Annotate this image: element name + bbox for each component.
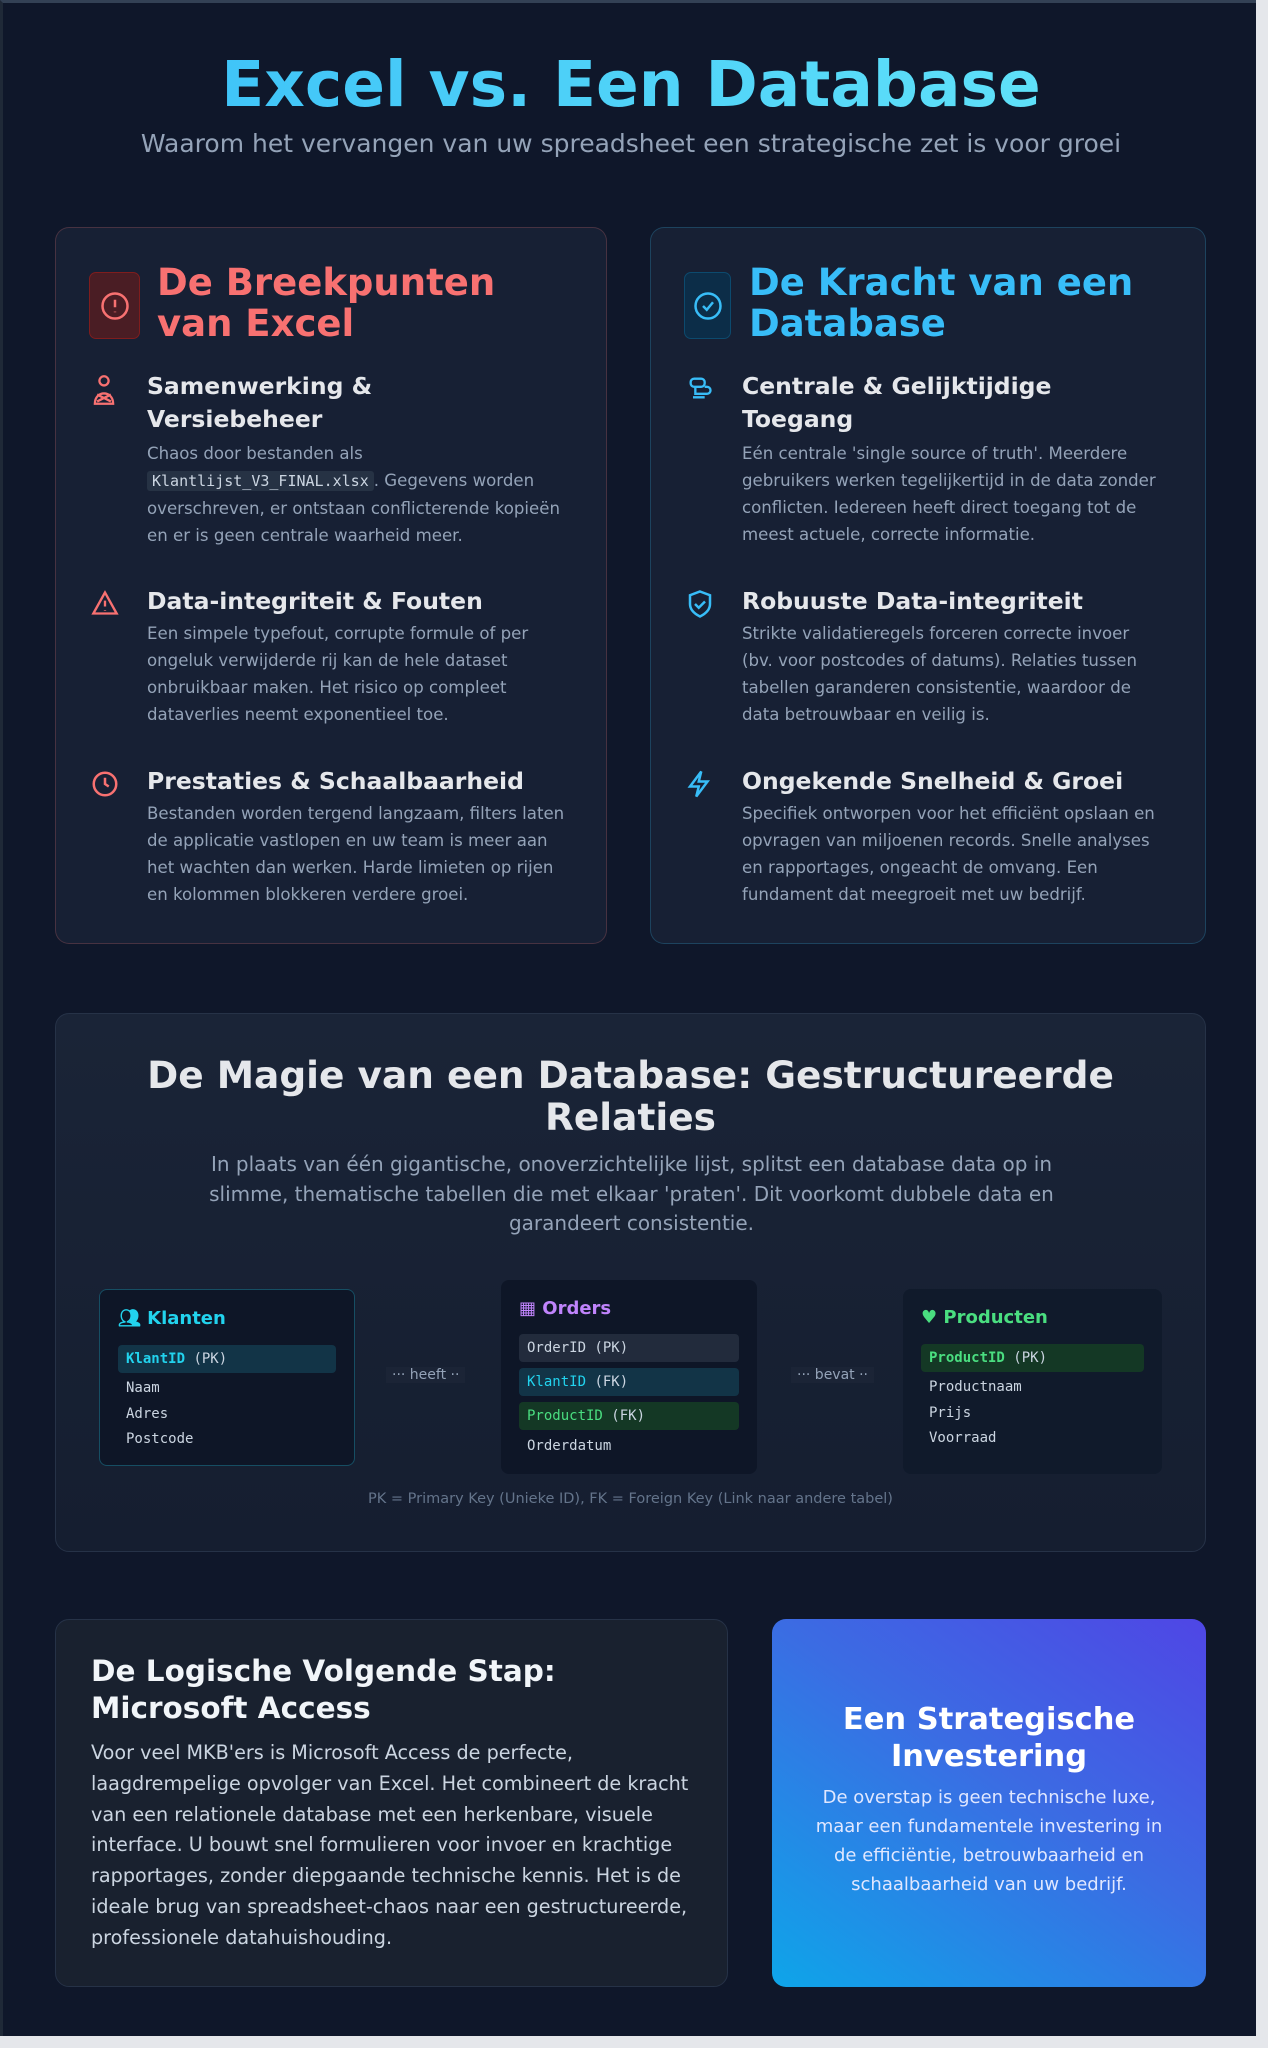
panel: breekpunten van excel: Data-integriteit & Fouten — [147, 587, 483, 615]
table: producten: Prijs — [929, 1405, 971, 1421]
title — [3, 45, 1259, 125]
panel: kracht van een database — [650, 227, 1206, 944]
callout: strategische investering — [772, 1619, 1206, 1987]
heading: De Breekpunten — [157, 261, 495, 304]
table: producten: Voorraad — [929, 1430, 996, 1446]
panel: kracht van een database: Centrale & Gelijktijdige Toegang — [742, 372, 1051, 433]
heading: Een Strategische — [843, 1702, 1135, 1737]
table: producten: ProductID (PK) — [929, 1350, 1047, 1366]
description: In plaats van één gigantische, onoverzichtelijke lijst, splitst een database data op in slimme, thematische tabellen die met elkaar 'praten'. Dit voorkomt dubbele data en garandeert consistentie. — [209, 1152, 1054, 1235]
section heading: De Magie van een Database: Gestructureerde — [147, 1053, 1114, 1097]
panel: breekpunten van excel — [55, 227, 607, 944]
body: De overstap is geen technische luxe, maar een fundamentele investering in de efficiëntie, betrouwbaarheid en schaalbaarheid van uw bedrijf. — [816, 1787, 1162, 1895]
heading — [843, 1702, 1135, 1774]
item: prestaties — [92, 767, 564, 904]
table: klanten: Naam — [126, 1380, 160, 1396]
heading: van Excel — [157, 302, 354, 345]
panel: breekpunten van excel: Chaos door bestanden als Klantlijst_V3_FINAL.xlsx . Gegevens worden overschreven, er ontstaan conflicterende kopieën en er is geen centrale waarheid meer. — [147, 444, 560, 545]
table: klanten: 👥︎ Klanten — [118, 1308, 226, 1329]
section heading: Relaties — [545, 1095, 716, 1139]
heading — [749, 261, 1133, 345]
item: samenwerking — [94, 372, 560, 545]
heading: Database — [749, 302, 946, 345]
panel: microsoft access — [55, 1619, 728, 1987]
panel: kracht van een database: Ongekende Snelheid & Groei — [742, 767, 1123, 795]
table: orders: ProductID (FK) — [527, 1408, 645, 1424]
legend: PK = Primary Key (Unieke ID), FK = Foreign Key (Link naar andere tabel) — [368, 1491, 893, 1507]
label: heeft: ··· heeft ·· — [392, 1367, 459, 1383]
table: orders: OrderID (PK) — [527, 1340, 628, 1356]
table: producten: ♥ Producten — [921, 1307, 1048, 1328]
panel: kracht van een database: Specifiek ontworpen voor het efficiënt opslaan en opvragen van miljoenen records. Snelle analyses en rapportages, ongeacht de omvang. Een fundament dat meegroeit met uw bedrijf. — [742, 804, 1155, 904]
heading: Investering — [891, 1739, 1087, 1774]
heading: De Logische Volgende Stap: — [91, 1654, 556, 1688]
icon: check — [684, 272, 731, 339]
item: data-integriteit — [91, 587, 528, 724]
section heading — [147, 1053, 1114, 1139]
panel: breekpunten van excel: Een simpele typefout, corrupte formule of per ongeluk verwijderde rij kan de hele dataset onbruikbaar maken. Het risico op compleet dataverlies neemt exponentieel toe. — [147, 624, 528, 724]
panel: kracht van een database: Strikte validatieregels forceren correcte invoer (bv. voor postcodes of datums). Relaties tussen tabellen garanderen consistentie, waardoor de data betrouwbaar en veilig is. — [742, 624, 1137, 724]
panel: kracht van een database: Robuuste Data-integriteit — [742, 587, 1083, 615]
subtitle: Waarom het vervangen van uw spreadsheet een strategische zet is voor groei — [141, 129, 1121, 158]
panel: breekpunten van excel: Bestanden worden tergend langzaam, filters laten de applicatie vastlopen en uw team is meer aan het wachten dan werken. Harde limieten op rijen en kolommen blokkeren verdere groei. — [147, 804, 564, 904]
table: orders: KlantID (FK) — [527, 1374, 628, 1390]
table: klanten — [99, 1289, 355, 1466]
icon: alert — [89, 272, 140, 339]
table: klanten: KlantID (PK) — [126, 1351, 227, 1367]
table: producten: Productnaam — [929, 1379, 1022, 1395]
panel: breekpunten van excel: Prestaties & Schaalbaarheid — [147, 767, 524, 795]
table: orders — [501, 1280, 757, 1474]
heading: De Kracht van een — [749, 261, 1133, 304]
panel: magie van een database — [55, 1013, 1206, 1552]
heading: Microsoft Access — [91, 1691, 371, 1725]
title: Excel vs. Een Database — [221, 48, 1041, 121]
table: producten — [903, 1289, 1162, 1474]
table: orders: Orderdatum — [527, 1438, 611, 1454]
table: orders: ▦ Orders — [519, 1298, 611, 1319]
table: klanten: Adres — [126, 1406, 168, 1422]
item: snelheid — [688, 767, 1155, 904]
item: centrale toegang — [690, 372, 1156, 544]
heading — [91, 1654, 556, 1725]
label: bevat: ··· bevat ·· — [797, 1367, 868, 1383]
panel: kracht van een database: Eén centrale 'single source of truth'. Meerdere gebruikers werken tegelijkertijd in de data zonder conflicten. Iedereen heeft direct toegang tot de meest actuele, correcte informatie. — [742, 444, 1156, 544]
item: robuuste integriteit — [688, 587, 1137, 724]
body text: Voor veel MKB'ers is Microsoft Access de perfecte, laagdrempelige opvolger van Excel. Het combineert de kracht van een relationele database met een herkenbare, visuele interface. U bouwt snel formulieren voor invoer en krachtige rapportages, zonder diepgaande technische kennis. Het is de ideale brug van spreadsheet-chaos naar een gestructureerde, professionele datahuishouding. — [91, 1741, 688, 1949]
heading — [157, 261, 495, 345]
panel: breekpunten van excel: Samenwerking & Versiebeheer — [147, 372, 372, 433]
table: klanten: Postcode — [126, 1431, 193, 1447]
